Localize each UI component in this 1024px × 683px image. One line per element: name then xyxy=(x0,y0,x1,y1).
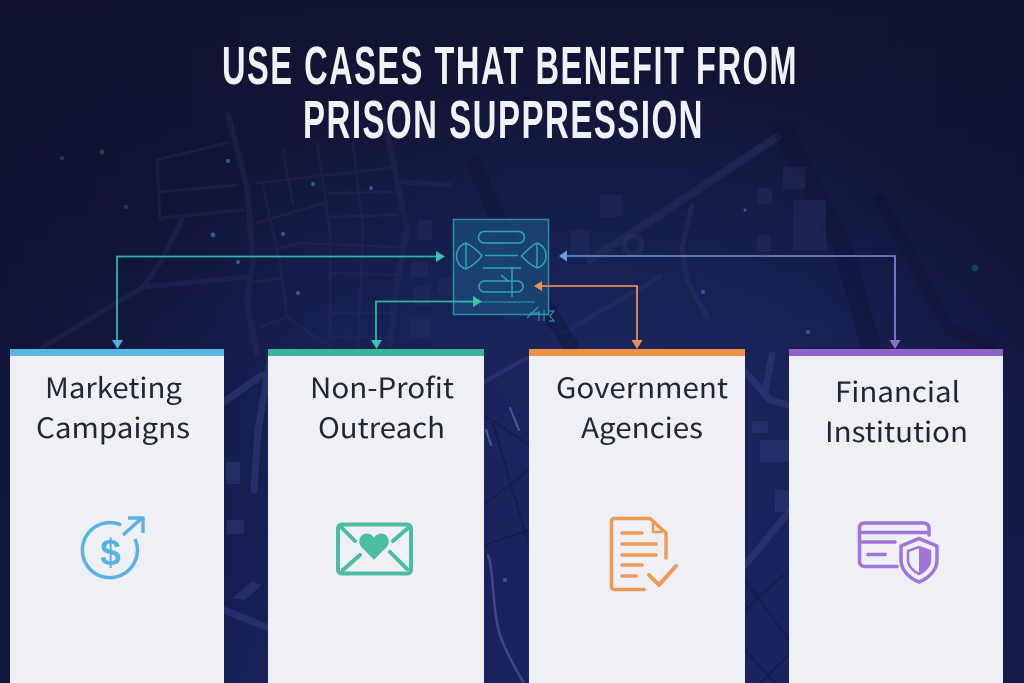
icon: dollar target arrow: $ xyxy=(100,532,121,573)
heading: financial institution: Institution xyxy=(825,411,968,451)
panel: financial institution xyxy=(789,349,1003,683)
heading: non-profit outreach: Outreach xyxy=(318,407,445,447)
arrow: non-profit outreach link xyxy=(371,296,482,349)
central flow diagram icon xyxy=(454,220,554,321)
heading: marketing campaigns: Campaigns xyxy=(36,407,190,447)
arrow: financial institution link xyxy=(559,250,900,349)
heading: marketing campaigns: Marketing xyxy=(45,367,182,407)
heading: non-profit outreach: Non-Profit xyxy=(310,367,454,407)
arrow: government agencies link xyxy=(534,281,642,349)
background street map xyxy=(43,115,990,355)
heading: marketing campaigns xyxy=(36,367,190,447)
title xyxy=(222,36,798,150)
heading: government agencies xyxy=(556,367,728,447)
panel: non-profit outreach xyxy=(268,349,484,683)
icon: document with check xyxy=(612,518,676,590)
panel: government agencies xyxy=(529,349,745,683)
heading: government agencies: Government xyxy=(556,367,728,407)
panel: marketing campaigns xyxy=(10,349,224,683)
heading: financial institution xyxy=(825,371,968,451)
icon: dollar target arrow xyxy=(82,518,143,578)
heading: non-profit outreach xyxy=(310,367,454,447)
heading: financial institution: Financial xyxy=(835,371,960,411)
title: PRISON SUPPRESSION xyxy=(303,90,704,150)
background map between panels xyxy=(224,355,789,683)
heading: government agencies: Agencies xyxy=(581,407,703,447)
icon: credit card with shield xyxy=(860,523,937,582)
background light dots xyxy=(60,150,978,582)
arrow: marketing campaigns link xyxy=(112,251,445,349)
icon: envelope with heart xyxy=(338,524,411,574)
